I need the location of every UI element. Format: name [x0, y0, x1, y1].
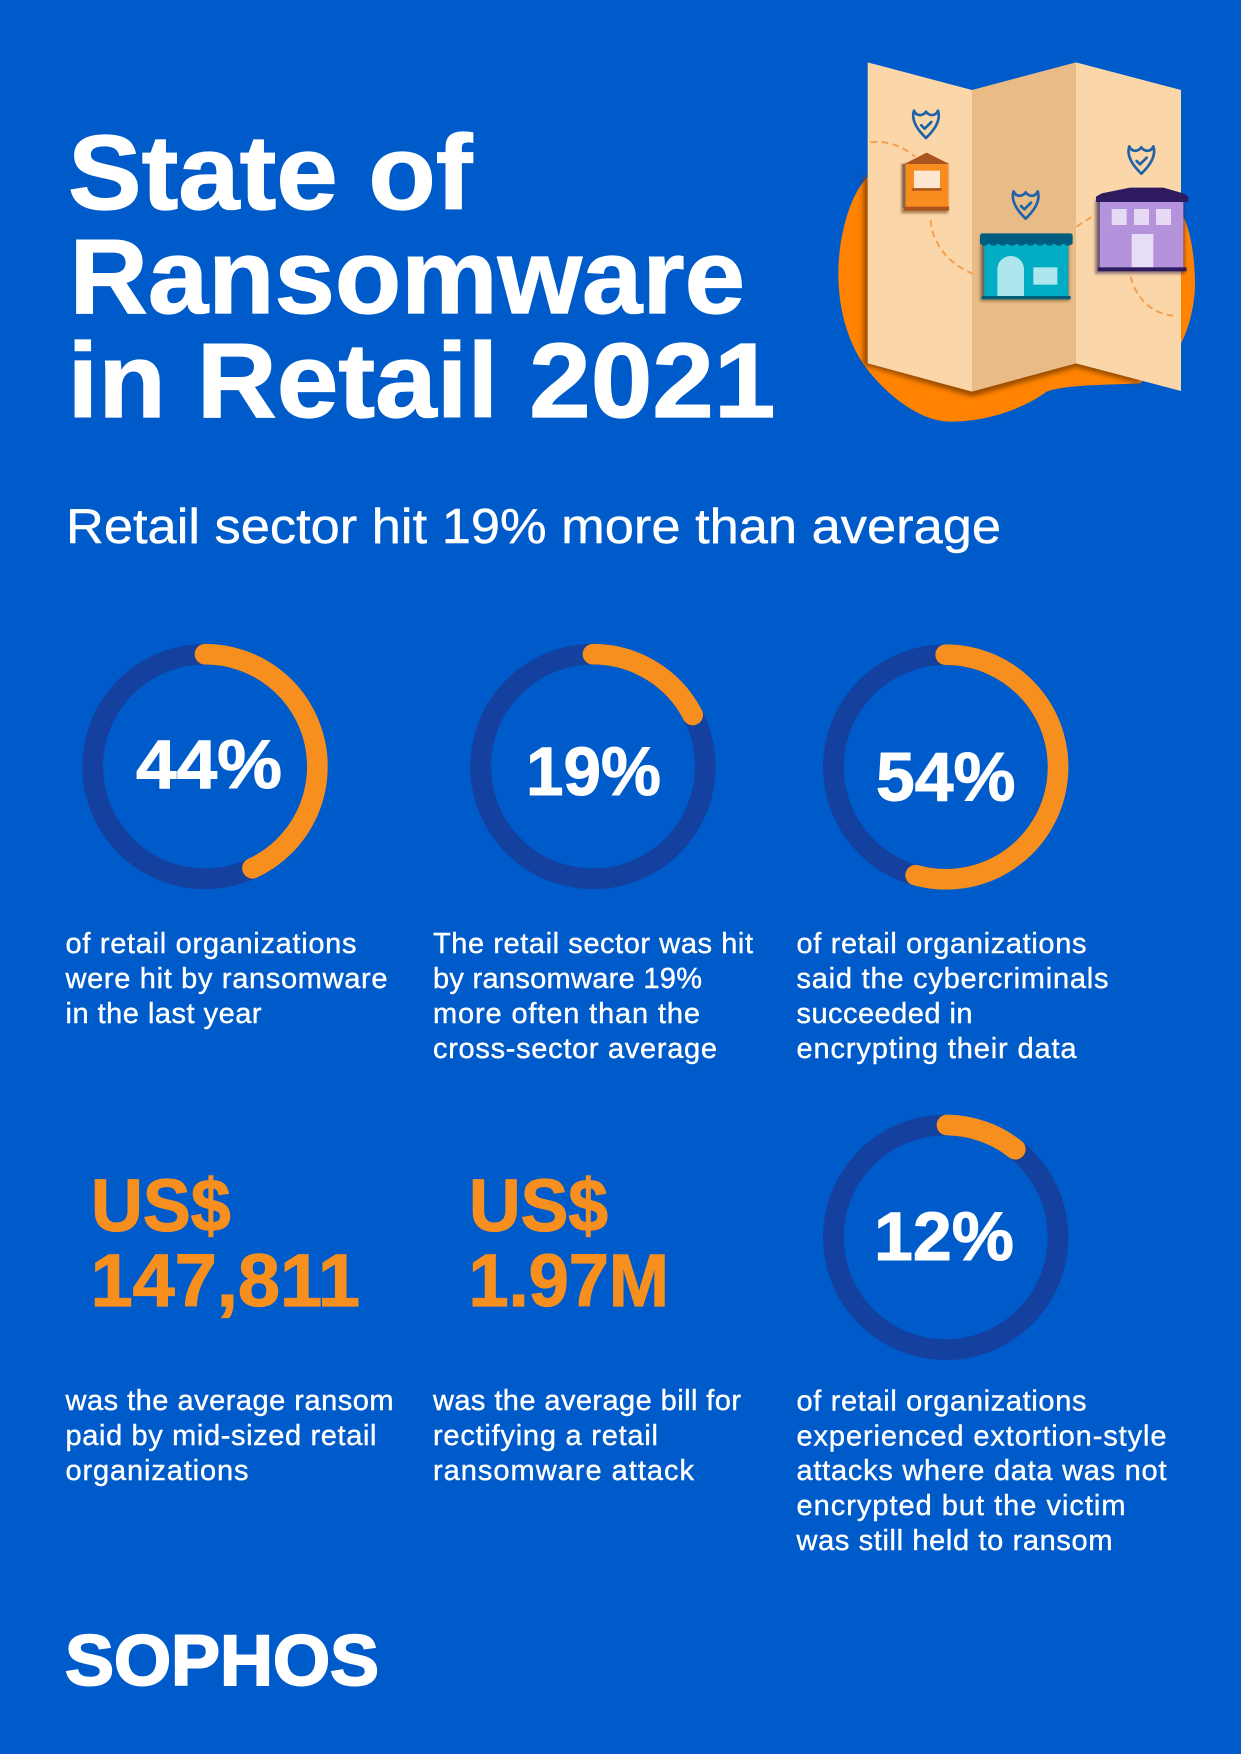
caption: 54%: succeeded in	[796, 998, 972, 1030]
caption: 44%	[64, 928, 388, 1030]
icon: shield 1	[913, 111, 939, 138]
title: in Retail 2021	[68, 322, 776, 440]
stat: US$ 1.97M	[468, 1164, 669, 1322]
caption: 19%: cross-sector average	[433, 1033, 717, 1065]
caption: 54%: of retail organizations	[796, 928, 1086, 960]
caption: average ransom	[64, 1385, 394, 1487]
title	[68, 114, 776, 440]
caption: 12%	[796, 1386, 1166, 1557]
caption: average ransom: was the average ransom	[64, 1385, 394, 1417]
logo: Sophos: SOPHOS	[65, 1622, 379, 1701]
caption: 12%: encrypted but the victim	[796, 1490, 1126, 1522]
map shadow	[863, 177, 1140, 397]
caption: average ransom: organizations	[66, 1455, 248, 1487]
stat: 19% donut: 19%	[526, 733, 661, 810]
orange blob	[838, 177, 1195, 422]
caption: 54%: said the cybercriminals	[796, 963, 1108, 995]
caption: average bill: was the average bill for	[432, 1385, 741, 1417]
title: Ransomware	[70, 218, 745, 336]
caption: 12%: experienced extortion-style	[796, 1420, 1166, 1452]
caption: 19%: by ransomware 19%	[433, 963, 702, 995]
stat: 54% donut: 54%	[876, 738, 1016, 816]
caption: 19%	[433, 928, 753, 1065]
caption: 19%: more often than the	[433, 998, 700, 1030]
shop: purple building	[1095, 188, 1188, 274]
stat: US$ 1.97M: 1.97M	[468, 1239, 669, 1322]
map right panel	[1076, 62, 1181, 391]
shop: teal store	[980, 233, 1073, 301]
caption: 44%: of retail organizations	[66, 928, 356, 960]
caption: average ransom: paid by mid-sized retail	[66, 1420, 376, 1452]
caption: 12%: of retail organizations	[796, 1386, 1086, 1418]
title: State of	[68, 114, 473, 232]
caption: 44%: were hit by ransomware	[64, 963, 388, 995]
caption: 19%: The retail sector was hit	[433, 928, 753, 960]
caption: 12%: attacks where data was not	[796, 1455, 1166, 1487]
stat: 12% donut	[833, 1125, 1058, 1350]
stat: US$ 147,811: 147,811	[91, 1239, 360, 1322]
subtitle: Retail sector hit 19% more than average	[66, 500, 1001, 554]
stat: 54% donut	[833, 655, 1058, 879]
caption: average bill: rectifying a retail	[433, 1420, 658, 1452]
stat: 19% donut	[481, 654, 705, 879]
map middle panel	[972, 62, 1076, 392]
stat: 44% donut	[93, 654, 317, 879]
icon: shield 2	[1013, 191, 1038, 219]
caption: average bill	[432, 1385, 741, 1487]
stat: US$ 147,811	[91, 1164, 360, 1322]
illustration: folded map with shops	[838, 62, 1195, 422]
caption: 44%: in the last year	[66, 998, 262, 1030]
caption: 54%: encrypting their data	[796, 1033, 1077, 1065]
icon: shield 3	[1129, 146, 1154, 174]
stat: US$ 1.97M: US$	[469, 1164, 608, 1247]
dashed routes	[871, 142, 1177, 316]
caption: 54%	[796, 928, 1108, 1065]
stat: US$ 147,811: US$	[91, 1164, 231, 1247]
caption: 12%: was still held to ransom	[796, 1525, 1112, 1557]
map left panel	[868, 62, 972, 392]
stat: 44% donut: 44%	[136, 726, 282, 803]
shop: orange kiosk	[901, 153, 949, 213]
caption: average bill: ransomware attack	[433, 1455, 694, 1487]
stat: 12% donut: 12%	[874, 1198, 1014, 1275]
